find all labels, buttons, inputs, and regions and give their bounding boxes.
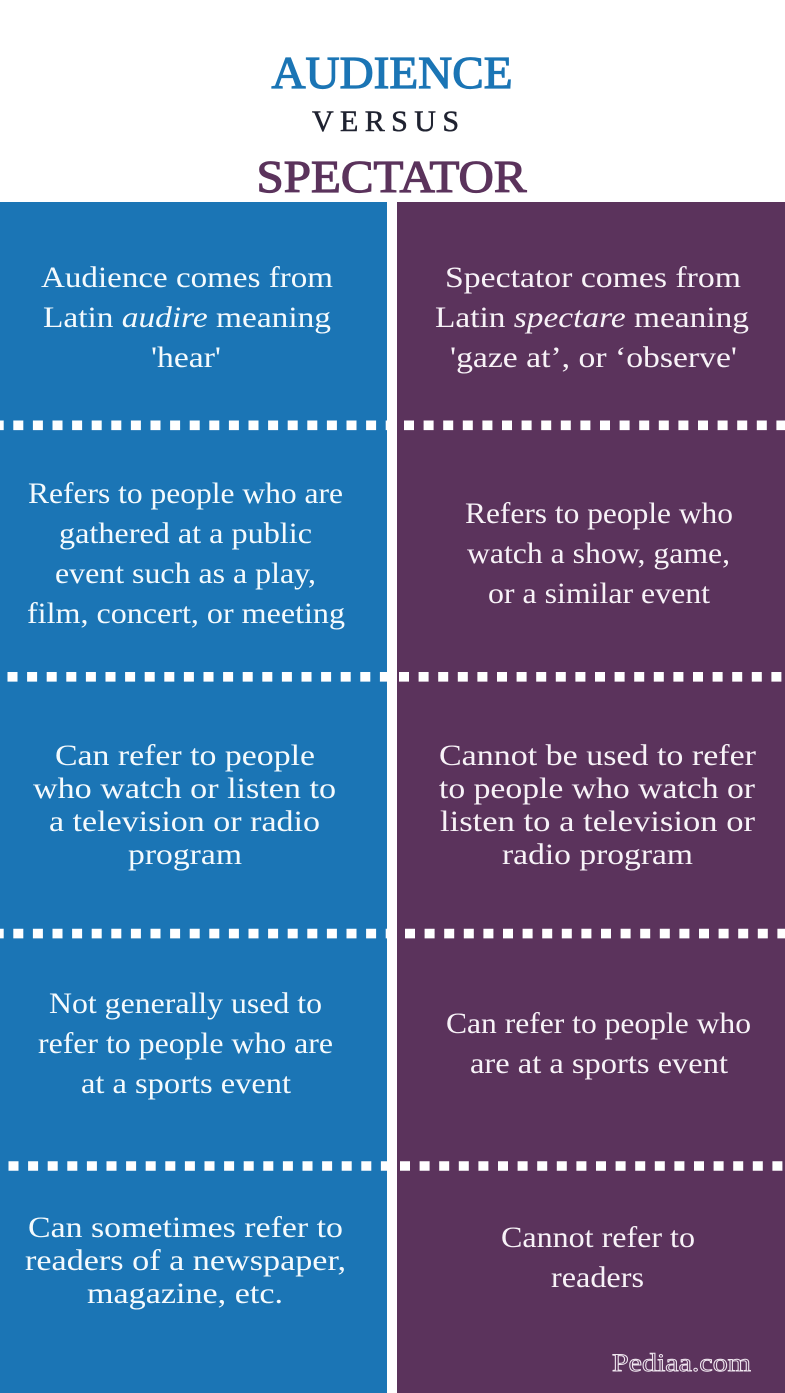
text: spectator broadcast use: Cannot be used to refer: [439, 739, 756, 772]
panel: audience column: [0, 202, 387, 1393]
text: spectator readers use: [501, 1221, 695, 1294]
panel: spectator column: [397, 202, 785, 1393]
text: audience definition: [27, 477, 345, 630]
text: audience origin: Latin audire meaning: [43, 301, 331, 334]
text: audience sports use: refer to people who are: [38, 1027, 333, 1060]
text: spectator definition: [465, 497, 733, 610]
text: spectator readers use: readers: [551, 1261, 644, 1294]
text: audience origin: 'hear': [151, 341, 221, 374]
text: audience broadcast use: a television or radio: [49, 805, 320, 838]
text: spectator sports use: Can refer to people who: [446, 1007, 751, 1040]
text: audience definition: film, concert, or meeting: [27, 597, 345, 630]
text: spectator sports use: are at a sports event: [470, 1047, 729, 1080]
text: audience broadcast use: who watch or listen to: [33, 772, 336, 805]
text: spectator readers use: Cannot refer to: [501, 1221, 695, 1254]
text: spectator origin: Latin spectare meaning: [435, 301, 749, 334]
heading: audience: AUDIENCE: [272, 47, 512, 98]
text: spectator broadcast use: listen to a television or: [440, 805, 755, 838]
text: audience definition: Refers to people who are: [28, 477, 343, 510]
text: audience origin: [41, 261, 333, 374]
text: audience origin: Audience comes from: [41, 261, 333, 294]
logo: Pediaa.com: Pediaa.com: [612, 1350, 752, 1377]
text: spectator broadcast use: to people who watch or: [439, 772, 755, 805]
text: spectator broadcast use: radio program: [502, 838, 693, 871]
text: audience sports use: Not generally used to: [49, 987, 322, 1020]
text: spectator origin: Spectator comes from: [445, 261, 741, 294]
text: audience sports use: [38, 987, 333, 1100]
text: audience broadcast use: Can refer to people: [55, 739, 315, 772]
text: audience readers use: readers of a newspaper,: [25, 1244, 346, 1277]
text: spectator definition: watch a show, game,: [467, 537, 730, 570]
text: audience broadcast use: program: [128, 838, 242, 871]
text: spectator definition: or a similar event: [488, 577, 711, 610]
text: spectator broadcast use: [439, 739, 756, 871]
text: audience definition: event such as a play,: [55, 557, 316, 590]
title: [256, 47, 527, 202]
heading: versus: VERSUS: [312, 105, 459, 138]
text: audience readers use: Can sometimes refer to: [28, 1211, 343, 1244]
text: spectator origin: [435, 261, 749, 374]
text: audience readers use: [25, 1211, 346, 1310]
text: audience readers use: magazine, etc.: [87, 1277, 283, 1310]
text: spectator origin: 'gaze at’, or ‘observe': [450, 341, 737, 374]
text: audience sports use: at a sports event: [81, 1067, 292, 1100]
text: spectator sports use: [446, 1007, 751, 1080]
text: spectator definition: Refers to people who: [465, 497, 733, 530]
text: audience definition: gathered at a public: [59, 517, 312, 550]
text: audience broadcast use: [33, 739, 336, 871]
heading: spectator: SPECTATOR: [256, 151, 527, 202]
